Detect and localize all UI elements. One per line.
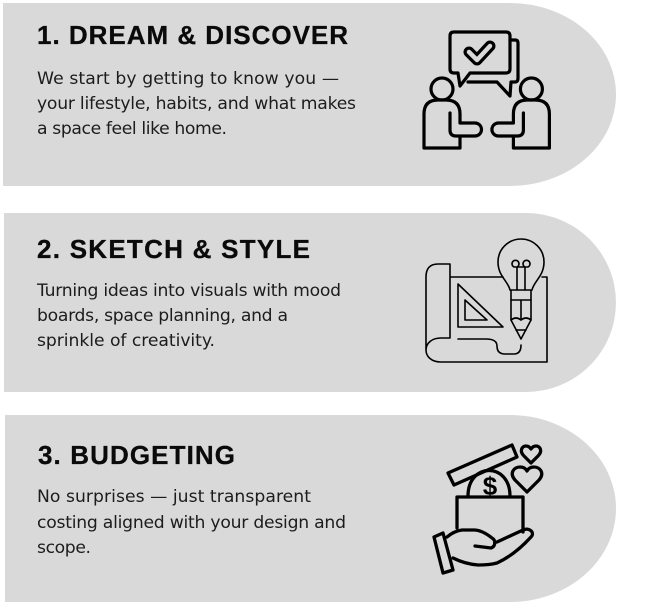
text block: step 1 description: a space feel like home. xyxy=(37,119,227,139)
text block: step 2 description: boards, space planning, and a xyxy=(37,306,288,326)
heading: step 2: 2. SKETCH & STYLE xyxy=(37,234,310,264)
icon: two people talking with check mark bubble xyxy=(424,32,549,148)
text block: step 3 description: No surprises — just transparent xyxy=(37,487,311,507)
text block: step 1 description: We start by getting to know you — xyxy=(37,69,339,89)
text block: step 1 description xyxy=(37,69,356,139)
text block: step 1 description: your lifestyle, habits, and what makes xyxy=(37,94,356,114)
text block: step 2 description: Turning ideas into visuals with mood xyxy=(36,281,341,301)
panel: budgeting xyxy=(5,415,616,602)
icon: blueprint with set square, light bulb and pencil xyxy=(426,239,547,362)
heading: step 3: 3. BUDGETING xyxy=(38,440,235,470)
icon: dollar sign: $ xyxy=(483,471,498,501)
text block: step 2 description xyxy=(36,281,341,351)
icon: hand holding box with coin and hearts xyxy=(434,445,542,573)
text block: step 2 description: sprinkle of creativity. xyxy=(37,331,215,351)
panel: dream and discover xyxy=(3,3,616,186)
heading: step 1: 1. DREAM & DISCOVER xyxy=(37,20,348,50)
panel: sketch and style xyxy=(4,213,616,392)
text block: step 3 description: costing aligned with your design and xyxy=(37,513,346,533)
text block: step 3 description xyxy=(37,487,346,558)
text block: step 3 description: scope. xyxy=(37,538,91,558)
